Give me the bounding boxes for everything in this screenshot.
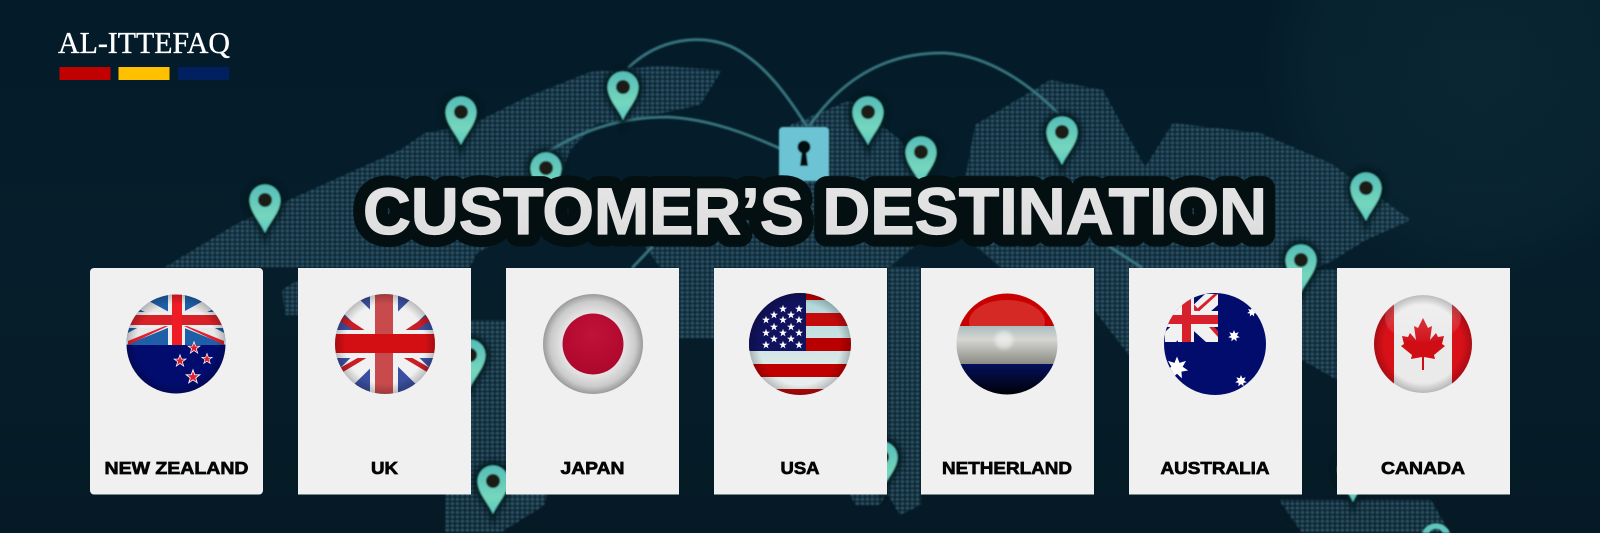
card: USA: USA — [780, 458, 820, 478]
card: Canada: CANADA — [1381, 458, 1465, 478]
card: UK: UK — [371, 458, 398, 478]
partial pin at bottom edge — [1422, 523, 1450, 533]
dotted world map — [165, 66, 1450, 533]
logo — [58, 25, 230, 80]
card: Japan — [506, 268, 679, 494]
connection arcs — [546, 40, 1141, 267]
card: UK — [298, 268, 471, 494]
card: New Zealand: NEW ZEALAND — [104, 458, 248, 478]
card: Canada — [1337, 268, 1510, 494]
card: New Zealand — [90, 268, 263, 494]
title: CUSTOMER’S DESTINATION — [363, 174, 1267, 248]
card: Netherland — [921, 268, 1094, 494]
logo: AL-ITTEFAQ — [58, 25, 230, 60]
card: Netherland: NETHERLAND — [942, 458, 1072, 478]
map pins — [248, 70, 1383, 516]
card: USA — [714, 268, 887, 494]
card: Australia — [1129, 268, 1302, 494]
title: CUSTOMER’S DESTINATION — [363, 174, 1267, 248]
card: Japan: JAPAN — [560, 458, 624, 478]
lock icon — [779, 127, 829, 181]
card: Australia: AUSTRALIA — [1160, 458, 1270, 478]
